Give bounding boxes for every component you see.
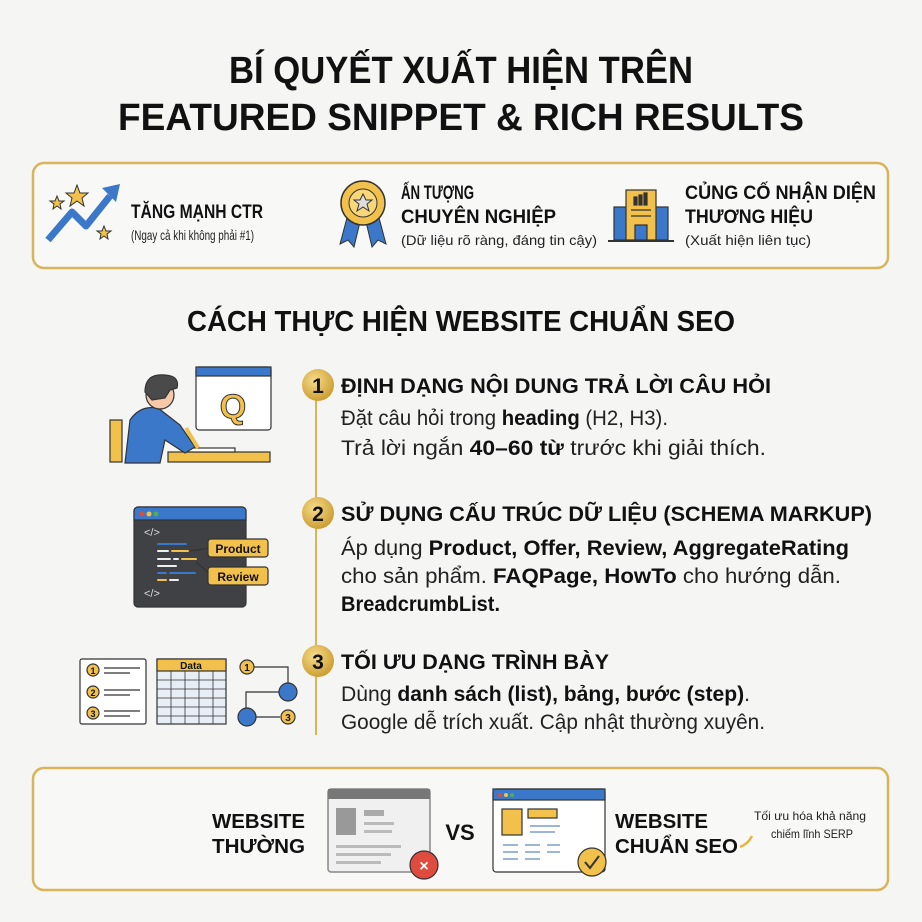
text: CTR: TĂNG MẠNH CTR [131, 201, 263, 223]
icon: buildings [608, 190, 674, 241]
step 3: Dùng danh sách (list), bảng, bước (step). [341, 683, 750, 706]
step 2: 2 [312, 503, 324, 526]
title: FEATURED SNIPPET & RICH RESULTS [118, 97, 804, 139]
step 2 [302, 497, 872, 616]
icon: list table flow: 2 [90, 688, 96, 698]
text: CTR: (Ngay cả khi không phải #1) [131, 227, 254, 243]
text: CTR [131, 201, 263, 243]
step 3 [302, 645, 765, 734]
icon: list table flow: 3 [90, 709, 96, 719]
text: SEO website [615, 811, 738, 858]
icon: grey window with x [328, 789, 438, 879]
text: normal website: WEBSITE [212, 811, 305, 833]
text: professional: ẤN TƯỢNG [401, 182, 474, 204]
step 3: 3 [312, 651, 324, 674]
callout: SERP [740, 809, 866, 847]
icon: code window: </> [144, 527, 160, 539]
timeline line [315, 400, 317, 735]
heading: how to: CÁCH THỰC HIỆN WEBSITE CHUẨN SEO [187, 304, 735, 338]
icon: grey window with x: × [419, 858, 429, 875]
text: normal website [212, 811, 305, 858]
text: professional: (Dữ liệu rõ ràng, đáng tin cậy) [401, 232, 597, 248]
icon: person writing: Q [220, 388, 246, 426]
step 1: 1 [312, 375, 324, 398]
panel: comparison [33, 768, 888, 890]
step 3: TỐI ƯU DẠNG TRÌNH BÀY [341, 650, 609, 674]
text: normal website: THƯỜNG [212, 834, 305, 858]
icon: person writing [110, 367, 271, 463]
text: SEO website: CHUẨN SEO [615, 835, 738, 858]
step 2: cho sản phẩm. FAQPage, HowTo cho hướng dẫn. [341, 565, 841, 588]
title [118, 48, 804, 139]
text: VS: VS [445, 820, 475, 845]
icon: list table flow: 1 [244, 663, 250, 674]
icon: list table flow [80, 659, 297, 726]
text: brand [685, 182, 876, 248]
icon: code window [134, 507, 268, 607]
step 1: Trả lời ngắn 40–60 từ trước khi giải thích. [341, 437, 766, 460]
icon: list table flow: 1 [90, 666, 96, 676]
panel: benefits [33, 163, 888, 268]
text: professional [401, 182, 597, 248]
icon: chart arrow stars [48, 184, 120, 240]
step 2: BreadcrumbList. [341, 593, 500, 616]
icon: list table flow: 3 [285, 713, 291, 724]
text: professional: CHUYÊN NGHIỆP [401, 206, 556, 228]
icon: code window: Review [217, 570, 259, 584]
text: brand: CỦNG CỐ NHẬN DIỆN [685, 182, 876, 204]
text: SEO website: WEBSITE [615, 811, 708, 833]
step 2: Áp dụng Product, Offer, Review, AggregateRating [341, 537, 849, 560]
step 1 [302, 369, 771, 460]
title: BÍ QUYẾT XUẤT HIỆN TRÊN [229, 48, 693, 92]
step 1: Đặt câu hỏi trong heading (H2, H3). [341, 407, 668, 430]
icon: code window: </> [144, 588, 160, 600]
step 3: Google dễ trích xuất. Cập nhật thường xuyên. [341, 711, 765, 734]
text: brand: (Xuất hiện liên tục) [685, 232, 811, 248]
callout: SERP: chiếm lĩnh SERP [771, 827, 853, 841]
text: brand: THƯƠNG HIỆU [685, 206, 813, 228]
icon: good window with check [493, 789, 606, 876]
icon: code window: Product [215, 542, 261, 556]
step 1: ĐỊNH DẠNG NỘI DUNG TRẢ LỜI CÂU HỎI [341, 374, 771, 398]
icon: list table flow: Data [180, 661, 202, 672]
callout: SERP: Tối ưu hóa khả năng [754, 809, 866, 823]
icon: badge [340, 181, 386, 247]
step 2: SỬ DỤNG CẤU TRÚC DỮ LIỆU (SCHEMA MARKUP) [341, 502, 872, 526]
